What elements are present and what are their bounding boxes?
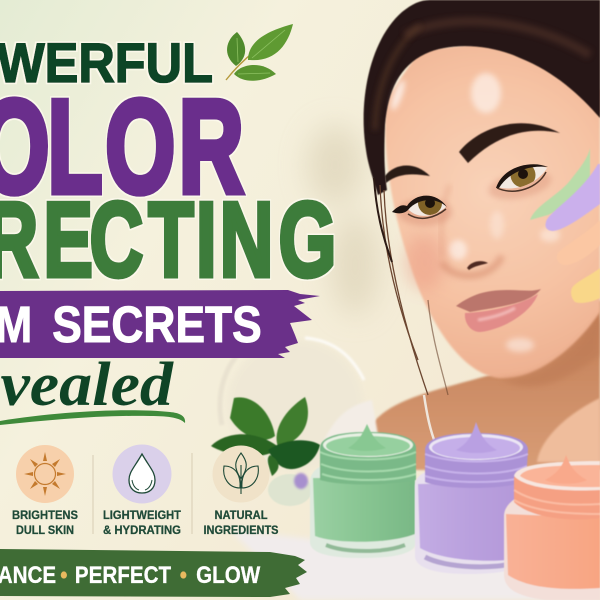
neck and shoulder: [322, 300, 600, 470]
label: & HYDRATING: [103, 523, 181, 537]
cream jar: green: [310, 424, 416, 558]
mint leaves: [211, 397, 320, 506]
purple brush banner: [0, 290, 320, 358]
background leaf shadow: [307, 125, 379, 315]
feature: brightens dull skin: [12, 445, 78, 537]
woman portrait: [322, 0, 600, 470]
icon: leaves: [212, 446, 270, 502]
right eyebrow: [459, 123, 560, 163]
left eyebrow: [385, 165, 430, 183]
nose: [442, 185, 502, 276]
label: DULL SKIN: [16, 523, 74, 537]
marble surface: [230, 530, 600, 600]
label: BRIGHTENS: [12, 508, 78, 522]
green underline swoosh: [0, 410, 185, 425]
cream swatch: green: [530, 148, 590, 220]
cream swatch: purple: [545, 164, 600, 231]
banner text: BALANCE PERFECT GLOW: GLOW: [196, 562, 261, 588]
hand: [537, 398, 600, 462]
label: LIGHTWEIGHT: [103, 508, 182, 522]
banner text: BALANCE PERFECT GLOW: PERFECT: [75, 562, 171, 588]
icon: sun: [16, 445, 74, 503]
feature: natural ingredients: [204, 446, 278, 537]
hair: [364, 0, 600, 395]
forehead and cheek highlights: [389, 73, 560, 352]
cheek blush: [405, 234, 445, 290]
right eye: [488, 164, 552, 200]
cream swatch: peach: [557, 220, 600, 265]
icon: water drop: [112, 444, 172, 504]
banner text: BALANCE PERFECT GLOW: •: [180, 562, 187, 588]
feature: lightweight and hydrating: [103, 444, 182, 537]
lips: [456, 289, 541, 332]
cream swatch: yellow: [571, 268, 600, 303]
green brush banner: [0, 549, 307, 597]
cream jar: coral: [504, 455, 600, 600]
label: INGREDIENTS: [204, 523, 278, 537]
chin shadow: [500, 315, 600, 387]
banner text: BALANCE PERFECT GLOW: [0, 562, 261, 588]
glass bowl: [220, 338, 364, 470]
leaf sprig: [226, 24, 293, 81]
banner text: BALANCE PERFECT GLOW: •: [60, 562, 68, 588]
label: NATURAL: [214, 508, 268, 522]
left eye: [392, 196, 453, 227]
cream jar: purple: [415, 422, 528, 574]
banner text: CREAM SECRETS: SECRETS: [52, 297, 262, 354]
face: [385, 40, 600, 378]
